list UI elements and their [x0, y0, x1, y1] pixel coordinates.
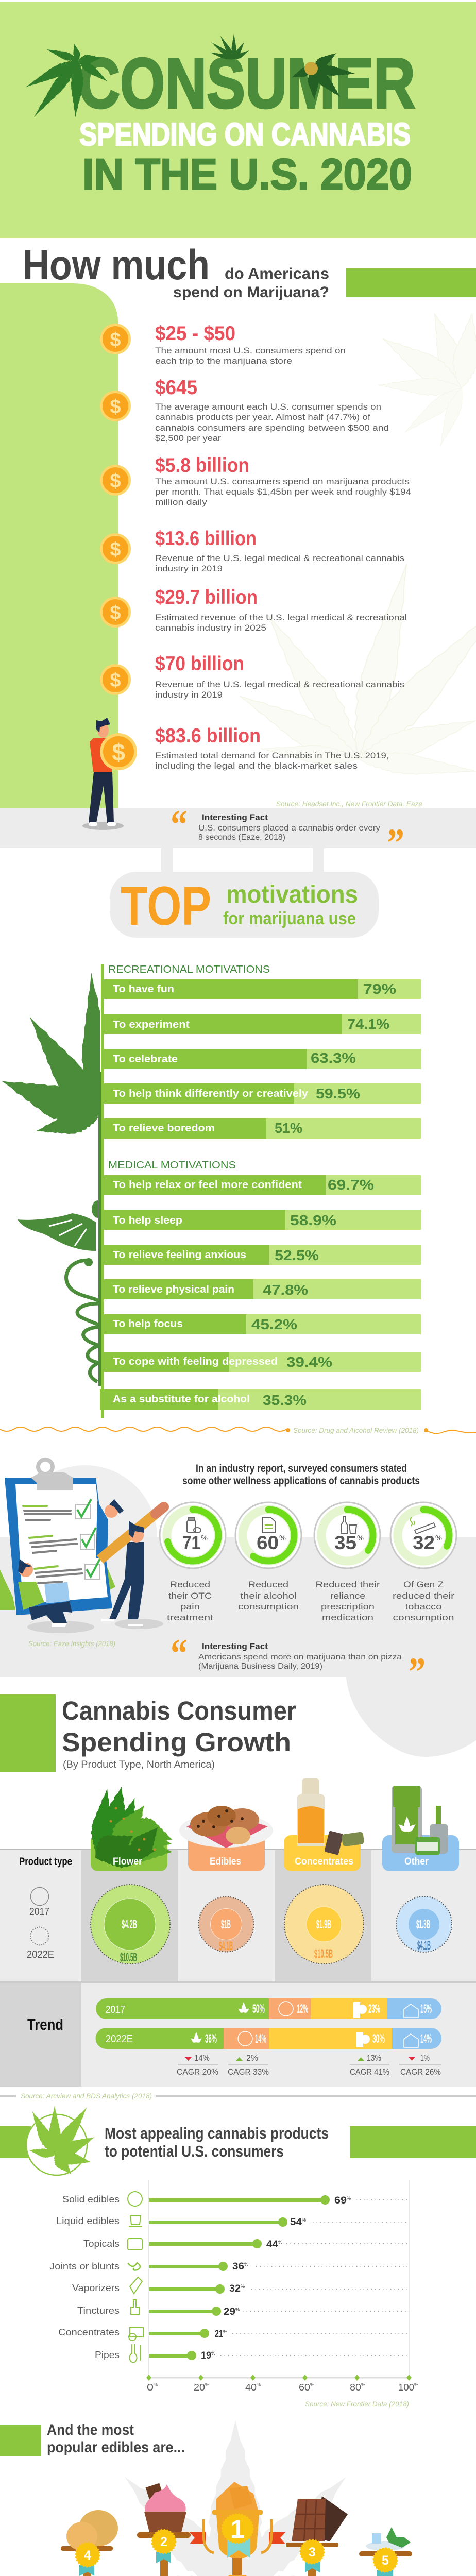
podium: bites — [123, 2483, 199, 2576]
row: pipes: % — [211, 2351, 215, 2356]
donut: 32 percent — [390, 1502, 456, 1568]
stat: $25 - $50: $ — [110, 329, 121, 351]
bar: to cope with feeling depressed: To cope with feeling depressed — [113, 1356, 278, 1367]
row: concentrates: 21 — [215, 2329, 223, 2340]
decorative gray blob — [346, 1677, 476, 1757]
change and CAGR: concentrates: CAGR 41% — [350, 2067, 389, 2077]
stat: $645: The average amount each U.S. consumer spends on — [155, 402, 381, 412]
illustration: clipboard and people — [0, 1460, 164, 1633]
bar: to celebrate: 63.3% — [311, 1050, 356, 1066]
stacked bar: 2017: 2017 — [106, 2004, 125, 2015]
row: joints or blunts: % — [244, 2262, 248, 2267]
bar: to relieve feeling anxious: To relieve feeling anxious — [113, 1249, 246, 1261]
donut: 71 percent: 71 — [182, 1532, 200, 1553]
label: medical motivations: MEDICAL MOTIVATIONS — [108, 1160, 236, 1171]
stacked bar: 2022E: 2022E — [106, 2033, 133, 2045]
stat: $29.7 billion: cannabis industry in 2025 — [155, 623, 266, 633]
row: vaporizers — [72, 2277, 409, 2294]
caption: gen z — [393, 1580, 454, 1622]
row: tinctures: % — [235, 2307, 240, 2312]
icon: man holding coin: $ — [112, 739, 125, 766]
stat: $83.6 billion: Estimated total demand for Cannabis in The U.S. 2019, — [155, 751, 389, 760]
stat: $645 — [100, 377, 389, 443]
row: liquid edibles — [56, 2216, 409, 2228]
caption: otc pain: pain — [180, 1602, 200, 1612]
podium: bites: 2 — [160, 2535, 167, 2549]
row: topicals — [83, 2239, 409, 2250]
stat: $25 - $50: The amount most U.S. consumers spend on — [155, 346, 346, 355]
icon: pills — [187, 1518, 201, 1533]
bar: to help sleep: To help sleep — [113, 1215, 182, 1226]
product: flower — [88, 1784, 177, 1871]
stat: $70 billion: industry in 2019 — [155, 690, 223, 700]
stat: $25 - $50: each trip to the marijuana store — [155, 357, 292, 366]
label: recreational motivations: RECREATIONAL MOTIVATIONS — [108, 964, 270, 975]
bar: to experiment: 74.1% — [347, 1016, 389, 1032]
caption: alcohol — [238, 1580, 299, 1612]
row: joints or blunts: 36 — [232, 2261, 244, 2272]
bubble: other — [396, 1896, 452, 1953]
legend: year circles — [27, 1888, 54, 1960]
row: solid edibles: 69 — [334, 2195, 347, 2206]
axis labels: 60 — [299, 2382, 310, 2393]
stat: $29.7 billion: $ — [110, 602, 121, 624]
stat: $645: cannabis consumers are spending between $500 and — [155, 423, 389, 433]
panel: green side column — [0, 283, 118, 808]
bar: as a substitute for alcohol — [100, 1389, 421, 1410]
icon: document — [262, 1517, 275, 1533]
caption: prescription: prescription — [321, 1602, 375, 1612]
donut: 35 percent: % — [357, 1534, 364, 1543]
stat: $25 - $50: $25 - $50 — [155, 323, 235, 345]
caption: gen z: consumption — [393, 1613, 454, 1622]
stat: $13.6 billion — [100, 528, 404, 573]
source divider: drug and alcohol review: Source: Drug and Alcohol Review (2018) — [293, 1426, 419, 1434]
source divider: arcview 2018 — [0, 2092, 476, 2100]
caption: otc pain — [167, 1580, 213, 1622]
stat: $5.8 billion: The amount U.S. consumers spend on marijuana products — [155, 477, 410, 486]
title: spending on cannabis: SPENDING ON CANNABIS — [79, 117, 411, 152]
panel: interesting fact 1 — [0, 802, 476, 865]
legend: year circles: 2017 — [29, 1906, 49, 1918]
change and CAGR: flower: 14% — [194, 2053, 210, 2063]
row: solid edibles: Solid edibles — [62, 2194, 120, 2205]
panel: interesting fact 1: “ — [171, 802, 188, 846]
axis labels: 80 — [350, 2382, 361, 2393]
bar: to help think differently — [104, 1083, 421, 1104]
stat: $13.6 billion: $13.6 billion — [155, 528, 257, 550]
label: trend: Trend — [27, 2015, 63, 2033]
bar: to have fun: 79% — [363, 981, 396, 997]
product: edibles: Edibles — [210, 1856, 241, 1867]
axis labels: 0 — [147, 2382, 154, 2393]
stat: $5.8 billion: per month. That equals $1,45bn per week and roughly $194 — [155, 487, 411, 497]
row: solid edibles — [62, 2192, 409, 2206]
bubble: flower: $4.2B — [122, 1918, 137, 1931]
stat: $645: $2,500 per year — [155, 434, 222, 443]
heading: most popular edibles — [47, 2421, 185, 2456]
donut: 35 percent: 35 — [334, 1532, 356, 1553]
callout: interesting fact 2: Americans spend more on marijuana than on pizza — [198, 1653, 402, 1662]
label: product type: Product type — [19, 1856, 72, 1868]
stacked bar: 2017: 12% — [297, 2002, 308, 2016]
heading: how much do americans spend on marijuana: How much — [23, 242, 210, 289]
stat: $83.6 billion: including the legal and the black-market sales — [155, 761, 358, 771]
accent rectangle — [0, 2425, 41, 2456]
source divider: arcview 2018: Source: Arcview and BDS Analytics (2018) — [21, 2092, 152, 2100]
caption: otc pain: treatment — [167, 1613, 213, 1622]
stat: $29.7 billion — [100, 586, 407, 633]
table background — [0, 1849, 476, 2087]
watermark: big gray leaf — [93, 2420, 378, 2576]
change and CAGR: concentrates: 13% — [367, 2053, 381, 2063]
source divider: drug and alcohol review — [0, 1426, 476, 1434]
bar: to relieve feeling anxious: 52.5% — [275, 1247, 319, 1263]
bar: as a substitute for alcohol: 35.3% — [263, 1392, 307, 1408]
change and CAGR: edibles: CAGR 33% — [228, 2067, 269, 2077]
row: topicals: 44 — [266, 2239, 278, 2250]
stacked bar: 2017: 50% — [252, 2002, 265, 2016]
change and CAGR: other: CAGR 26% — [400, 2067, 441, 2077]
stat: $13.6 billion: $ — [110, 539, 121, 561]
caption: prescription: Reduced their — [315, 1580, 380, 1589]
legend: year circles: 2022E — [27, 1949, 54, 1960]
bar: to help relax — [101, 1175, 421, 1195]
heading pill: top motivations: for marijuana use — [223, 909, 356, 928]
bar: to experiment — [104, 1014, 421, 1034]
stat: $29.7 billion: $29.7 billion — [155, 586, 258, 608]
bar: to cope with feeling depressed: 39.4% — [286, 1354, 332, 1370]
icon: top cannabis leaf — [210, 33, 250, 61]
donut: 71 percent — [160, 1502, 226, 1568]
band: most appealing accent — [0, 2126, 476, 2158]
stat: $5.8 billion: $ — [110, 470, 121, 492]
icon: left cannabis leaf — [23, 43, 110, 121]
product: concentrates: Concentrates — [295, 1856, 353, 1867]
callout: interesting fact 2: “ — [171, 1631, 188, 1675]
podium: chocolate bars: 3 — [309, 2545, 316, 2560]
heading pill: top motivations: TOP — [121, 875, 211, 937]
bar: to relieve boredom: To relieve boredom — [113, 1123, 215, 1134]
caption: alcohol: Reduced — [248, 1580, 288, 1589]
caption: otc pain: their OTC — [168, 1591, 212, 1601]
heading pill: top motivations: motivations — [226, 881, 358, 908]
panel: interesting fact 1: Interesting Fact — [202, 812, 268, 822]
podium: cookies: 4 — [84, 2548, 91, 2563]
panel: wellness background — [0, 1465, 476, 1677]
stat: $70 billion — [100, 653, 404, 700]
caption: prescription: reliance — [330, 1591, 365, 1601]
heading: industry report: some other wellness applications of cannabis products — [182, 1475, 420, 1487]
bar: to cope with feeling depressed — [101, 1352, 421, 1372]
heading: most popular edibles: And the most — [47, 2421, 134, 2438]
stacked bar: 2022E: 30% — [372, 2032, 385, 2046]
stat: $5.8 billion — [100, 454, 411, 507]
row: pipes: Pipes — [95, 2350, 120, 2360]
stat: $5.8 billion: million daily — [155, 498, 208, 507]
icon: leaf badge — [26, 2104, 97, 2178]
bubble: edibles: $1B — [221, 1918, 231, 1931]
podium: cookies — [50, 2510, 127, 2576]
heading: most appealing cannabis products: Most appealing cannabis products — [105, 2124, 329, 2142]
product: other — [382, 1786, 459, 1871]
heading: how much do americans spend on marijuana: do Americans — [225, 265, 329, 282]
bar: to help relax: To help relax or feel more confident — [113, 1179, 302, 1191]
bar: to have fun — [104, 979, 421, 999]
row: vaporizers: Vaporizers — [72, 2283, 120, 2293]
title: in the u.s. 2020: IN THE U.S. 2020 — [82, 150, 412, 198]
product: edibles — [179, 1806, 273, 1871]
bubble: edibles: $4.1B — [219, 1939, 233, 1953]
panel: header — [0, 2, 476, 238]
row: vaporizers: 32 — [229, 2283, 241, 2294]
bubble: edibles — [199, 1897, 253, 1953]
bar: to relieve feeling anxious — [101, 1245, 421, 1265]
accent rectangle — [0, 1694, 56, 1772]
heading: industry report: In an industry report, surveyed consumers stated — [196, 1463, 407, 1475]
podium: chocolate bars — [278, 2496, 354, 2576]
bubble: concentrates: $10.5B — [314, 1947, 333, 1961]
donut: 60 percent: 60 — [257, 1532, 279, 1553]
bubble: other: $1.3B — [416, 1918, 430, 1931]
chart: most appealing products — [49, 2180, 418, 2393]
heading: cannabis consumer spending growth — [62, 1696, 296, 1770]
heading: cannabis consumer spending growth: Cannabis Consumer — [62, 1696, 296, 1725]
icon: cigarette — [411, 1517, 435, 1534]
heading: industry report — [182, 1463, 420, 1487]
axis labels: 20 — [194, 2382, 205, 2393]
row: vaporizers: % — [241, 2284, 245, 2289]
donut: 60 percent — [235, 1502, 301, 1568]
donut: 32 percent: 32 — [413, 1532, 435, 1553]
bubble: other: $4.1B — [417, 1939, 431, 1953]
podium: gummies with trophy — [190, 2482, 285, 2576]
row: tinctures: Tinctures — [77, 2306, 120, 2316]
stat: $645: cannabis products per year. Almost half (47.7%) of — [155, 413, 370, 422]
bar: to celebrate — [104, 1049, 421, 1069]
callout: interesting fact 2: (Marijuana Business Daily, 2019) — [198, 1662, 322, 1671]
row: topicals: % — [278, 2240, 282, 2245]
product: flower: Flower — [113, 1856, 143, 1867]
bar: to relieve physical pain: To relieve physical pain — [113, 1284, 234, 1295]
bar: to celebrate: To celebrate — [113, 1054, 178, 1065]
source: headset: Source: Headset Inc., New Frontier Data, Eaze — [276, 800, 422, 808]
donut: 71 percent: % — [201, 1534, 208, 1543]
stat: $5.8 billion: $5.8 billion — [155, 454, 249, 477]
heading: most popular edibles: popular edibles are... — [47, 2439, 185, 2456]
stacked bar: 2017: 15% — [420, 2002, 432, 2016]
callout: interesting fact 2: Interesting Fact — [202, 1641, 268, 1651]
panel: interesting fact 1: U.S. consumers placed a cannabis order every — [198, 824, 380, 833]
stat: $70 billion: Revenue of the U.S. legal medical & recreational cannabis — [155, 680, 404, 689]
stacked bar: 2022E: 14% — [420, 2032, 432, 2046]
caption: alcohol: their alcohol — [240, 1591, 297, 1601]
icon: budding cannabis leaf — [290, 49, 356, 101]
source: new frontier: Source: New Frontier Data (2018) — [305, 2400, 409, 2408]
icon: bottle and glass — [341, 1516, 356, 1533]
row: pipes — [95, 2344, 409, 2362]
callout: interesting fact 2 — [171, 1631, 426, 1694]
stat: $70 billion: $70 billion — [155, 653, 244, 675]
podium: gummies with trophy: 1 — [230, 2515, 245, 2544]
stat: $70 billion: $ — [110, 670, 121, 691]
stacked bar: 2017: 23% — [368, 2002, 380, 2016]
axis labels: % — [257, 2382, 261, 2387]
caption: alcohol: consumption — [238, 1602, 299, 1612]
axis labels: % — [205, 2382, 209, 2387]
stat: $29.7 billion: Estimated revenue of the U.S. legal medical & recreational — [155, 613, 407, 622]
watermark leaves — [233, 309, 476, 782]
change and CAGR: flower — [177, 2053, 218, 2077]
axis labels: 100 — [398, 2382, 414, 2393]
bar: to have fun: To have fun — [113, 984, 174, 995]
stat: $645: $ — [110, 396, 121, 418]
podium: mints — [352, 2527, 427, 2576]
bubble: concentrates: $1.9B — [316, 1918, 331, 1931]
change and CAGR: concentrates — [350, 2053, 389, 2077]
bar: to relieve boredom: 51% — [275, 1120, 302, 1136]
stat: $83.6 billion: $83.6 billion — [155, 725, 261, 747]
panel: interesting fact 1: ” — [387, 820, 404, 865]
icon: caduceus — [18, 1072, 101, 1386]
stat: $13.6 billion: industry in 2019 — [155, 564, 223, 573]
stacked bar: 2017 — [96, 1998, 441, 2019]
bar: to relieve physical pain — [101, 1279, 421, 1299]
caption: prescription — [315, 1580, 380, 1622]
bubble: flower: $10.5B — [120, 1951, 137, 1964]
axis labels: % — [154, 2382, 158, 2387]
bar: to relieve boredom — [104, 1118, 421, 1139]
bar: to help focus — [101, 1314, 421, 1334]
stat: $83.6 billion — [155, 725, 389, 771]
row: concentrates: Concentrates — [58, 2327, 120, 2337]
change and CAGR: other — [399, 2053, 441, 2077]
caption: prescription: medication — [322, 1613, 373, 1622]
bar: to help think differently: 59.5% — [316, 1086, 360, 1101]
icon: large cannabis leaf — [2, 973, 100, 1134]
row: tinctures — [77, 2300, 409, 2317]
caption: otc pain: Reduced — [170, 1580, 210, 1589]
axis labels — [147, 2382, 418, 2393]
row: solid edibles: % — [347, 2196, 351, 2201]
axis line — [101, 964, 104, 1418]
row: liquid edibles: Liquid edibles — [56, 2216, 120, 2226]
product: concentrates — [284, 1778, 364, 1871]
product: other: Other — [404, 1856, 429, 1867]
source: eaze insights: Source: Eaze Insights (2018) — [28, 1639, 115, 1648]
heading: most appealing cannabis products: to potential U.S. consumers — [105, 2142, 284, 2160]
stat: $13.6 billion: Revenue of the U.S. legal medical & recreational cannabis — [155, 554, 404, 563]
row: joints or blunts — [49, 2261, 409, 2272]
donut: 32 percent: % — [435, 1534, 442, 1543]
bar: to help focus: 45.2% — [251, 1316, 297, 1332]
bar: as a substitute for alcohol: As a substitute for alcohol — [113, 1394, 250, 1405]
bar: to help sleep: 58.9% — [290, 1212, 336, 1228]
stacked bar: 2022E: 36% — [205, 2032, 217, 2046]
axis labels: % — [310, 2382, 314, 2387]
bubble: concentrates — [284, 1885, 364, 1964]
row: pipes: 19 — [201, 2350, 211, 2361]
donut: 60 percent: % — [279, 1534, 286, 1543]
row: joints or blunts: Joints or blunts — [49, 2261, 120, 2272]
stacked bar: 2022E — [96, 2028, 441, 2049]
heading pill: top motivations — [110, 872, 379, 938]
decorative accent bar — [346, 268, 476, 297]
row: liquid edibles: 54 — [290, 2217, 302, 2228]
connector bars — [161, 848, 324, 874]
change and CAGR: flower: CAGR 20% — [177, 2067, 218, 2077]
stacked bar: 2022E: 14% — [255, 2032, 266, 2046]
caption: gen z: reduced their — [393, 1591, 454, 1601]
bar: to experiment: To experiment — [113, 1019, 190, 1030]
callout: interesting fact 2: ” — [409, 1649, 426, 1694]
stat: $645: $645 — [155, 377, 197, 399]
change and CAGR: edibles: 2% — [246, 2053, 258, 2063]
axis labels: % — [414, 2382, 418, 2387]
heading: how much do americans spend on marijuana — [23, 242, 329, 301]
heading: cannabis consumer spending growth: (By Product Type, North America) — [63, 1759, 215, 1770]
row: tinctures: 29 — [224, 2307, 235, 2317]
donut: 35 percent — [314, 1502, 380, 1568]
caption: gen z: tobacco — [405, 1602, 442, 1612]
change and CAGR: edibles — [228, 2053, 269, 2077]
panel: interesting fact 1: 8 seconds (Eaze, 2018) — [198, 833, 285, 842]
stat: $25 - $50 — [100, 323, 346, 366]
row: liquid edibles: % — [302, 2217, 306, 2223]
bar: to help focus: To help focus — [113, 1318, 183, 1330]
bar: to help think differently: To help think differently or creatively — [113, 1088, 309, 1099]
axis labels: % — [361, 2382, 365, 2387]
bar: to help sleep — [101, 1210, 421, 1230]
bar: to relieve physical pain: 47.8% — [263, 1282, 308, 1298]
heading: most appealing cannabis products — [105, 2124, 329, 2160]
heading: how much do americans spend on marijuana: spend on Marijuana? — [173, 284, 329, 301]
change and CAGR: other: 1% — [420, 2053, 430, 2063]
icon: man holding coin — [82, 718, 137, 830]
row: topicals: Topicals — [83, 2239, 120, 2249]
caption: gen z: Of Gen Z — [403, 1580, 444, 1589]
heading: cannabis consumer spending growth: Spending Growth — [62, 1727, 291, 1757]
bar: to help relax: 69.7% — [328, 1177, 374, 1193]
row: concentrates — [58, 2327, 409, 2341]
row: concentrates: % — [223, 2329, 227, 2334]
axis labels: 40 — [245, 2382, 257, 2393]
podium: mints: 5 — [382, 2553, 389, 2568]
bubble: flower — [91, 1885, 170, 1964]
